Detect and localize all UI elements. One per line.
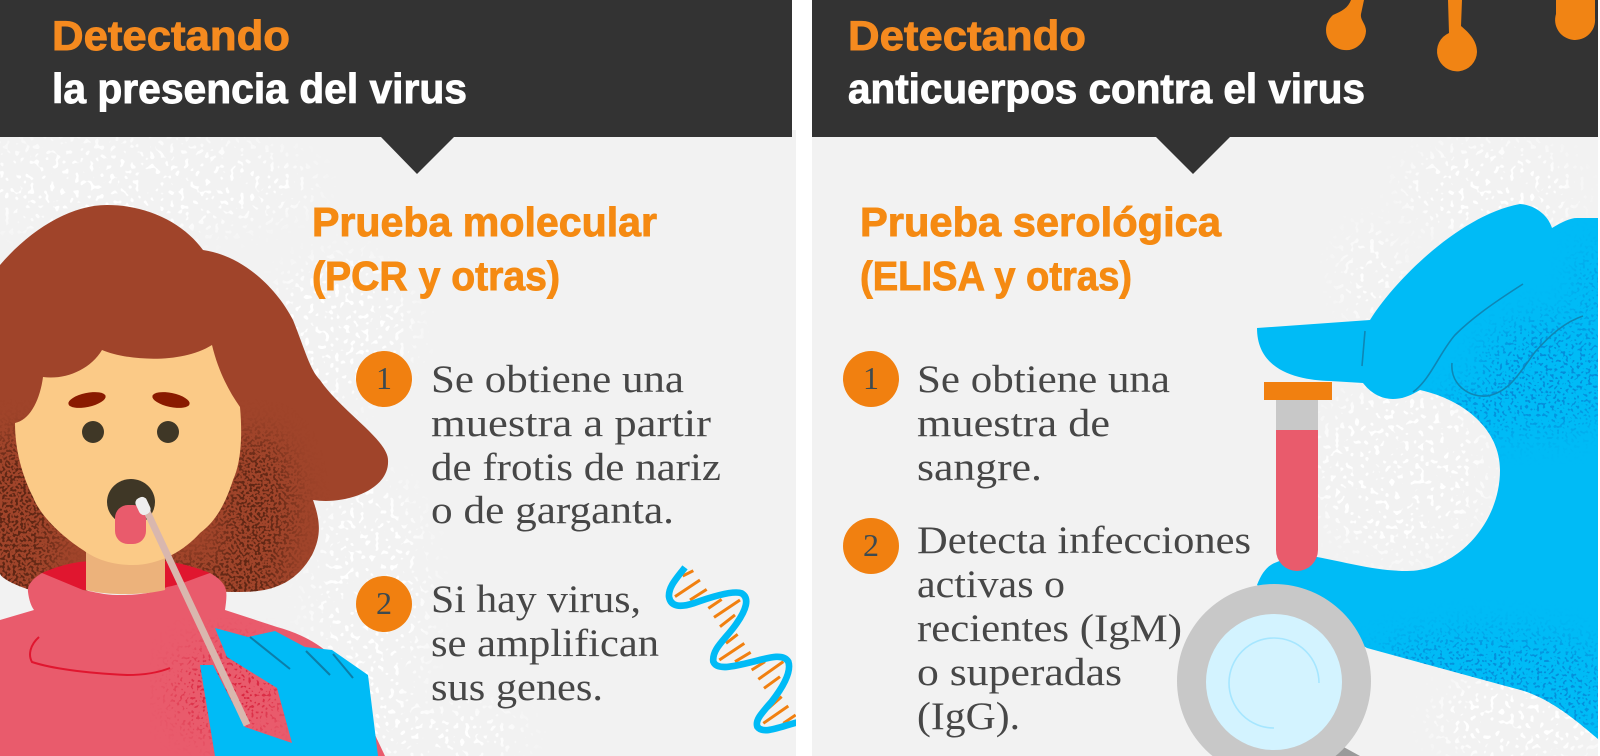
- hair texture: [0, 422, 310, 592]
- lens highlight: [1229, 638, 1319, 728]
- glove: [200, 628, 378, 756]
- step 2: serological: 2: [863, 527, 879, 563]
- eyes: [82, 421, 179, 443]
- icon: virus spikes in header: [1326, 0, 1595, 71]
- eyebrows: [67, 389, 191, 411]
- test tube blood: [1276, 430, 1318, 571]
- step 1: molecular: [356, 351, 721, 532]
- glove texture: [1378, 252, 1598, 734]
- subheading: molecular test: (PCR y otras): [312, 253, 560, 299]
- step 2: serological: recientes (IgM): [917, 607, 1182, 650]
- subheading: serological test: Prueba serológica: [860, 199, 1222, 245]
- glove: [1257, 204, 1598, 739]
- subheading: molecular test: Prueba molecular: [312, 199, 657, 245]
- step 2: molecular: se amplifican: [431, 622, 659, 665]
- test tube cap: [1264, 382, 1332, 400]
- collar inner: [42, 561, 210, 590]
- header: right: anticuerpos contra el virus: [848, 65, 1365, 112]
- face: [15, 345, 241, 565]
- sweater crease: [30, 637, 170, 675]
- hair: [0, 205, 388, 592]
- header: right: [812, 0, 1598, 174]
- header: left: [0, 0, 792, 174]
- swab: [143, 503, 247, 725]
- swab tip: [134, 495, 152, 517]
- subheading: serological test: [860, 199, 1222, 299]
- magnifier handle: [1335, 745, 1360, 756]
- neck: [86, 540, 165, 594]
- mouth: [107, 479, 155, 525]
- step 1: serological: 1: [863, 360, 879, 396]
- panel: left background: [0, 130, 796, 756]
- step 2: serological: (IgG).: [917, 695, 1020, 738]
- step 2: molecular: sus genes.: [431, 666, 603, 709]
- step 1: molecular: de frotis de nariz: [431, 446, 721, 489]
- step 2: serological: Detecta infecciones: [917, 519, 1251, 562]
- step 2: molecular: [356, 576, 659, 709]
- step 2: serological: activas o: [917, 563, 1065, 606]
- step 2: molecular: 2: [376, 585, 392, 621]
- step 1: molecular: Se obtiene una: [431, 358, 684, 401]
- step 1: molecular: 1: [376, 360, 392, 396]
- icon: DNA helix: [669, 567, 800, 730]
- subheading: serological test: (ELISA y otras): [860, 253, 1132, 299]
- panel: right background: [812, 130, 1598, 756]
- sweater: [0, 573, 385, 756]
- step 2: serological: [843, 518, 1251, 738]
- test tube glass: [1276, 400, 1318, 430]
- step 1: molecular: muestra a partir: [431, 402, 711, 445]
- step 1: serological: sangre.: [917, 446, 1042, 489]
- step 1: serological: Se obtiene una: [917, 358, 1170, 401]
- sweater texture: [162, 632, 286, 745]
- header: left: la presencia del virus: [52, 65, 467, 112]
- magnifier lens: [1206, 614, 1342, 750]
- magnifier: [1177, 584, 1371, 756]
- step 2: serological: o superadas: [917, 651, 1122, 694]
- illustration: gloved hand with test tube and magnifier: [1177, 200, 1600, 756]
- step 2: molecular: Si hay virus,: [431, 578, 641, 621]
- header: left: Detectando: [52, 12, 290, 59]
- subheading: molecular test: [312, 199, 657, 299]
- step 1: serological: [843, 351, 1170, 489]
- step 1: serological: muestra de: [917, 402, 1110, 445]
- glove creases: [1362, 284, 1583, 396]
- glove creases: [250, 637, 353, 678]
- step 1: molecular: o de garganta.: [431, 489, 674, 532]
- tongue: [115, 505, 146, 544]
- illustration: woman with nasal swab: [0, 205, 400, 756]
- header: right: Detectando: [848, 12, 1086, 59]
